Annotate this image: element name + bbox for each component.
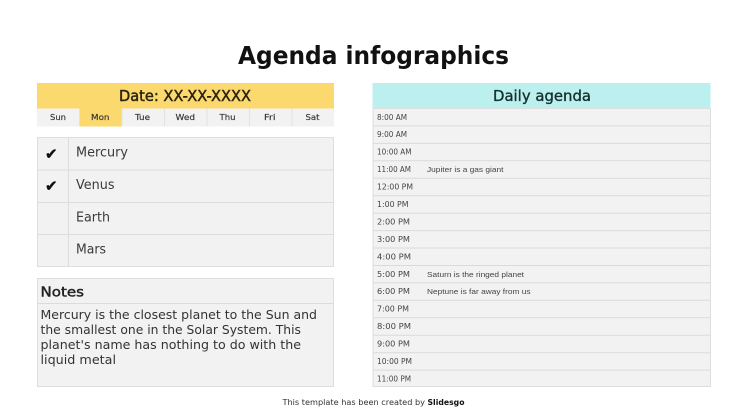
agenda rows: 2:00 PM [377,217,410,226]
weekday row: Wed [176,113,195,122]
agenda rows: 10:00 PM [377,357,412,366]
title: Agenda infographics [238,41,509,70]
agenda rows: 1:00 PM [377,200,409,209]
agenda rows: 9:00 AM [377,130,407,139]
agenda rows [373,108,710,386]
notes body: the smallest one in the Solar System. This [40,322,301,337]
weekday row: Fri [264,113,276,122]
agenda rows: 5:00 PM [377,270,410,279]
notes body [40,307,317,367]
weekday row: Tue [134,113,150,122]
item: Venus: Venus [76,178,115,193]
footer credit: Slidesgo [428,398,464,407]
agenda rows: 11:00 PM [377,374,411,383]
agenda header: Daily agenda [493,87,591,105]
agenda rows: 7:00 PM [377,305,409,314]
weekday row: Mon [91,113,110,122]
notes body: liquid metal [40,352,116,367]
item: Mars: Mars [76,242,106,258]
agenda rows: 11:00 AM [377,165,411,174]
agenda rows: 12:00 PM [377,183,413,192]
panel: daily agenda [372,83,710,386]
agenda rows: 10:00 AM [377,148,412,157]
panel: checklist [38,138,334,266]
agenda header [372,83,710,108]
agenda entry: Neptune: Neptune is far away from us [427,287,531,296]
item: Earth: Earth [76,210,110,226]
agenda rows: 9:00 PM [377,340,410,348]
weekday row: Thu [218,113,236,122]
notes body: planet's name has nothing to do with the [40,337,301,352]
notes heading: Notes [40,285,84,301]
agenda rows: 6:00 PM [377,287,410,296]
panel: notes [38,278,334,386]
agenda rows: 3:00 PM [377,235,410,244]
date header [37,83,334,108]
notes body: Mercury is the closest planet to the Sun and [40,307,317,322]
footer credit: This template has been created by [281,398,426,407]
weekday row: Sun [50,113,66,122]
item: Mercury: Mercury [76,146,128,161]
agenda entry: Jupiter: Jupiter is a gas giant [427,165,505,174]
panel: date and weekdays [37,83,334,126]
agenda rows: 4:00 PM [377,252,411,261]
agenda rows: 8:00 PM [377,322,411,331]
agenda entry: Saturn: Saturn is the ringed planet [427,270,525,279]
icon: check mark Venus: ✔ [45,177,58,195]
weekday row: Sat [306,113,320,122]
agenda rows: 8:00 AM [377,113,407,122]
icon: check mark Mercury: ✔ [45,145,58,163]
date header: Date: XX-XX-XXXX [119,87,251,105]
weekday row [37,108,334,126]
